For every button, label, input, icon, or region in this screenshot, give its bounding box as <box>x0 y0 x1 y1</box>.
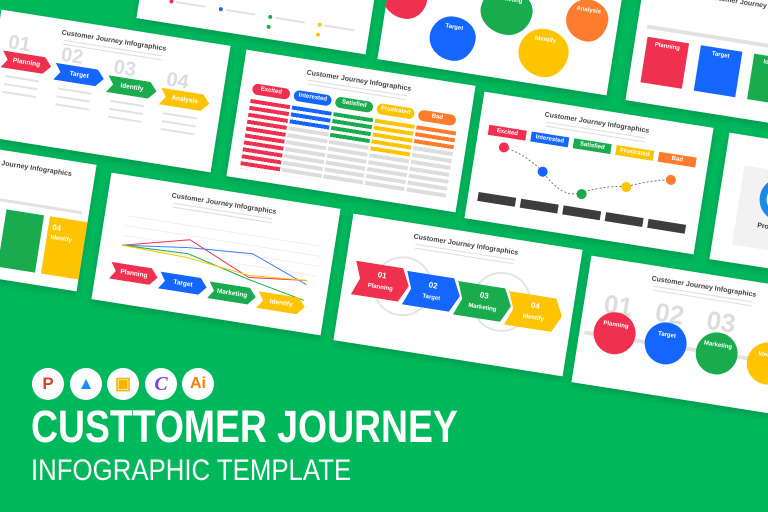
icon: powerpoint <box>32 368 64 400</box>
slide: emotion curve: Excited <box>496 128 518 137</box>
slide: planning arrows: Target <box>69 70 89 80</box>
slide: line chart: Target <box>173 279 193 289</box>
icon: keynote <box>70 368 102 400</box>
slide: numbered arrows: Marketing <box>468 303 497 313</box>
slide: numbered arrows: Planning <box>367 283 393 293</box>
slide: line chart: Planning <box>120 268 148 280</box>
slide: planning arrows <box>0 10 231 172</box>
slide: circles <box>571 256 768 418</box>
slide: circles: Planning <box>603 320 629 330</box>
slide: line chart: Customer Journey Infographics <box>171 192 277 216</box>
slide: identify boxes left: 04 <box>52 223 62 233</box>
slide: blobs: Identify <box>534 35 556 45</box>
slide: blobs <box>377 0 627 95</box>
slide: blobs: Target <box>445 23 464 32</box>
slide: circles: Marketing <box>703 340 732 351</box>
slide: circles: 03 <box>705 305 738 339</box>
slide: numbered arrows: 01 <box>377 270 387 281</box>
slide: planning boxes top right <box>625 0 768 136</box>
slide: line chart: Marketing <box>216 288 248 299</box>
icon: google slides <box>107 368 139 400</box>
slide: planning arrows: 02 <box>59 44 85 69</box>
slide: emotion bars <box>226 50 476 212</box>
subtitle: INFOGRAPHIC TEMPLATE <box>31 454 351 487</box>
slide: planning arrows: Identify <box>120 82 144 93</box>
slide: donut right <box>709 133 768 295</box>
slide: numbered arrows <box>333 214 583 376</box>
slide: blobs: Analysis <box>576 6 601 15</box>
slide: identify boxes left <box>0 129 97 291</box>
slide: emotion bars: Interested <box>298 92 327 103</box>
slide: emotion bars: Bad <box>431 113 443 121</box>
slide: numbered arrows: Target <box>422 293 441 302</box>
icon: canva: C <box>154 373 168 395</box>
slide: identify boxes left: Identify <box>50 235 72 244</box>
slide: circles: 02 <box>653 297 686 331</box>
slide: emotion bars: Frustrated <box>381 105 411 116</box>
slide: numbered arrows: 02 <box>428 280 438 291</box>
slide: planning arrows: 03 <box>112 56 138 81</box>
slide: planning arrows: 04 <box>165 68 190 94</box>
slide: emotion curve: Interested <box>535 134 564 145</box>
slide: planning arrows: Planning <box>12 57 41 68</box>
slide: planning boxes top right: Target <box>711 51 730 60</box>
icon: illustrator <box>182 368 214 400</box>
icon: google slides: ▣ <box>115 374 131 393</box>
slide: circles: Customer Journey Infographics <box>651 275 757 299</box>
slide: numbered arrows: Identify <box>522 313 544 323</box>
slide: emotion bars: Satisfied <box>341 99 367 109</box>
slide: numbered arrows: 03 <box>479 290 489 301</box>
slide: emotion bars: Customer Journey Infographics <box>306 69 412 93</box>
slide: planning arrows: Customer Journey Infographics <box>61 29 167 53</box>
slide: emotion curve: Frustrated <box>620 148 650 158</box>
slide: planning boxes top right: Planning <box>654 42 680 52</box>
slide: emotion curve: Customer Journey Infographics <box>544 111 650 135</box>
icon: illustrator: Ai <box>190 375 206 392</box>
icons: app logos <box>32 368 214 400</box>
slide: emotion bars: Excited <box>260 86 282 96</box>
slide: emotion curve: Satisfied <box>579 141 605 151</box>
title: CUSTTOMER JOURNEY <box>31 401 458 452</box>
slide: circles: Target <box>658 331 676 340</box>
icon: powerpoint: P <box>42 374 54 393</box>
slide: numbered arrows: Customer Journey Infographics <box>413 233 519 257</box>
slide: planning arrows: Analysis <box>171 94 198 105</box>
slide: numbered arrows: 04 <box>530 301 540 311</box>
slide: emotion curve: Bad <box>671 156 683 163</box>
slide: line chart: Identify <box>269 298 293 309</box>
slide: line chart <box>91 173 341 335</box>
slide: planning arrows: 01 <box>7 31 32 56</box>
slide: emotion curve <box>464 92 714 254</box>
slide: circles: 01 <box>602 288 635 323</box>
icon: canva <box>145 368 177 400</box>
slide: top partial bullets <box>136 0 386 54</box>
icon: keynote: ▲ <box>78 374 94 393</box>
